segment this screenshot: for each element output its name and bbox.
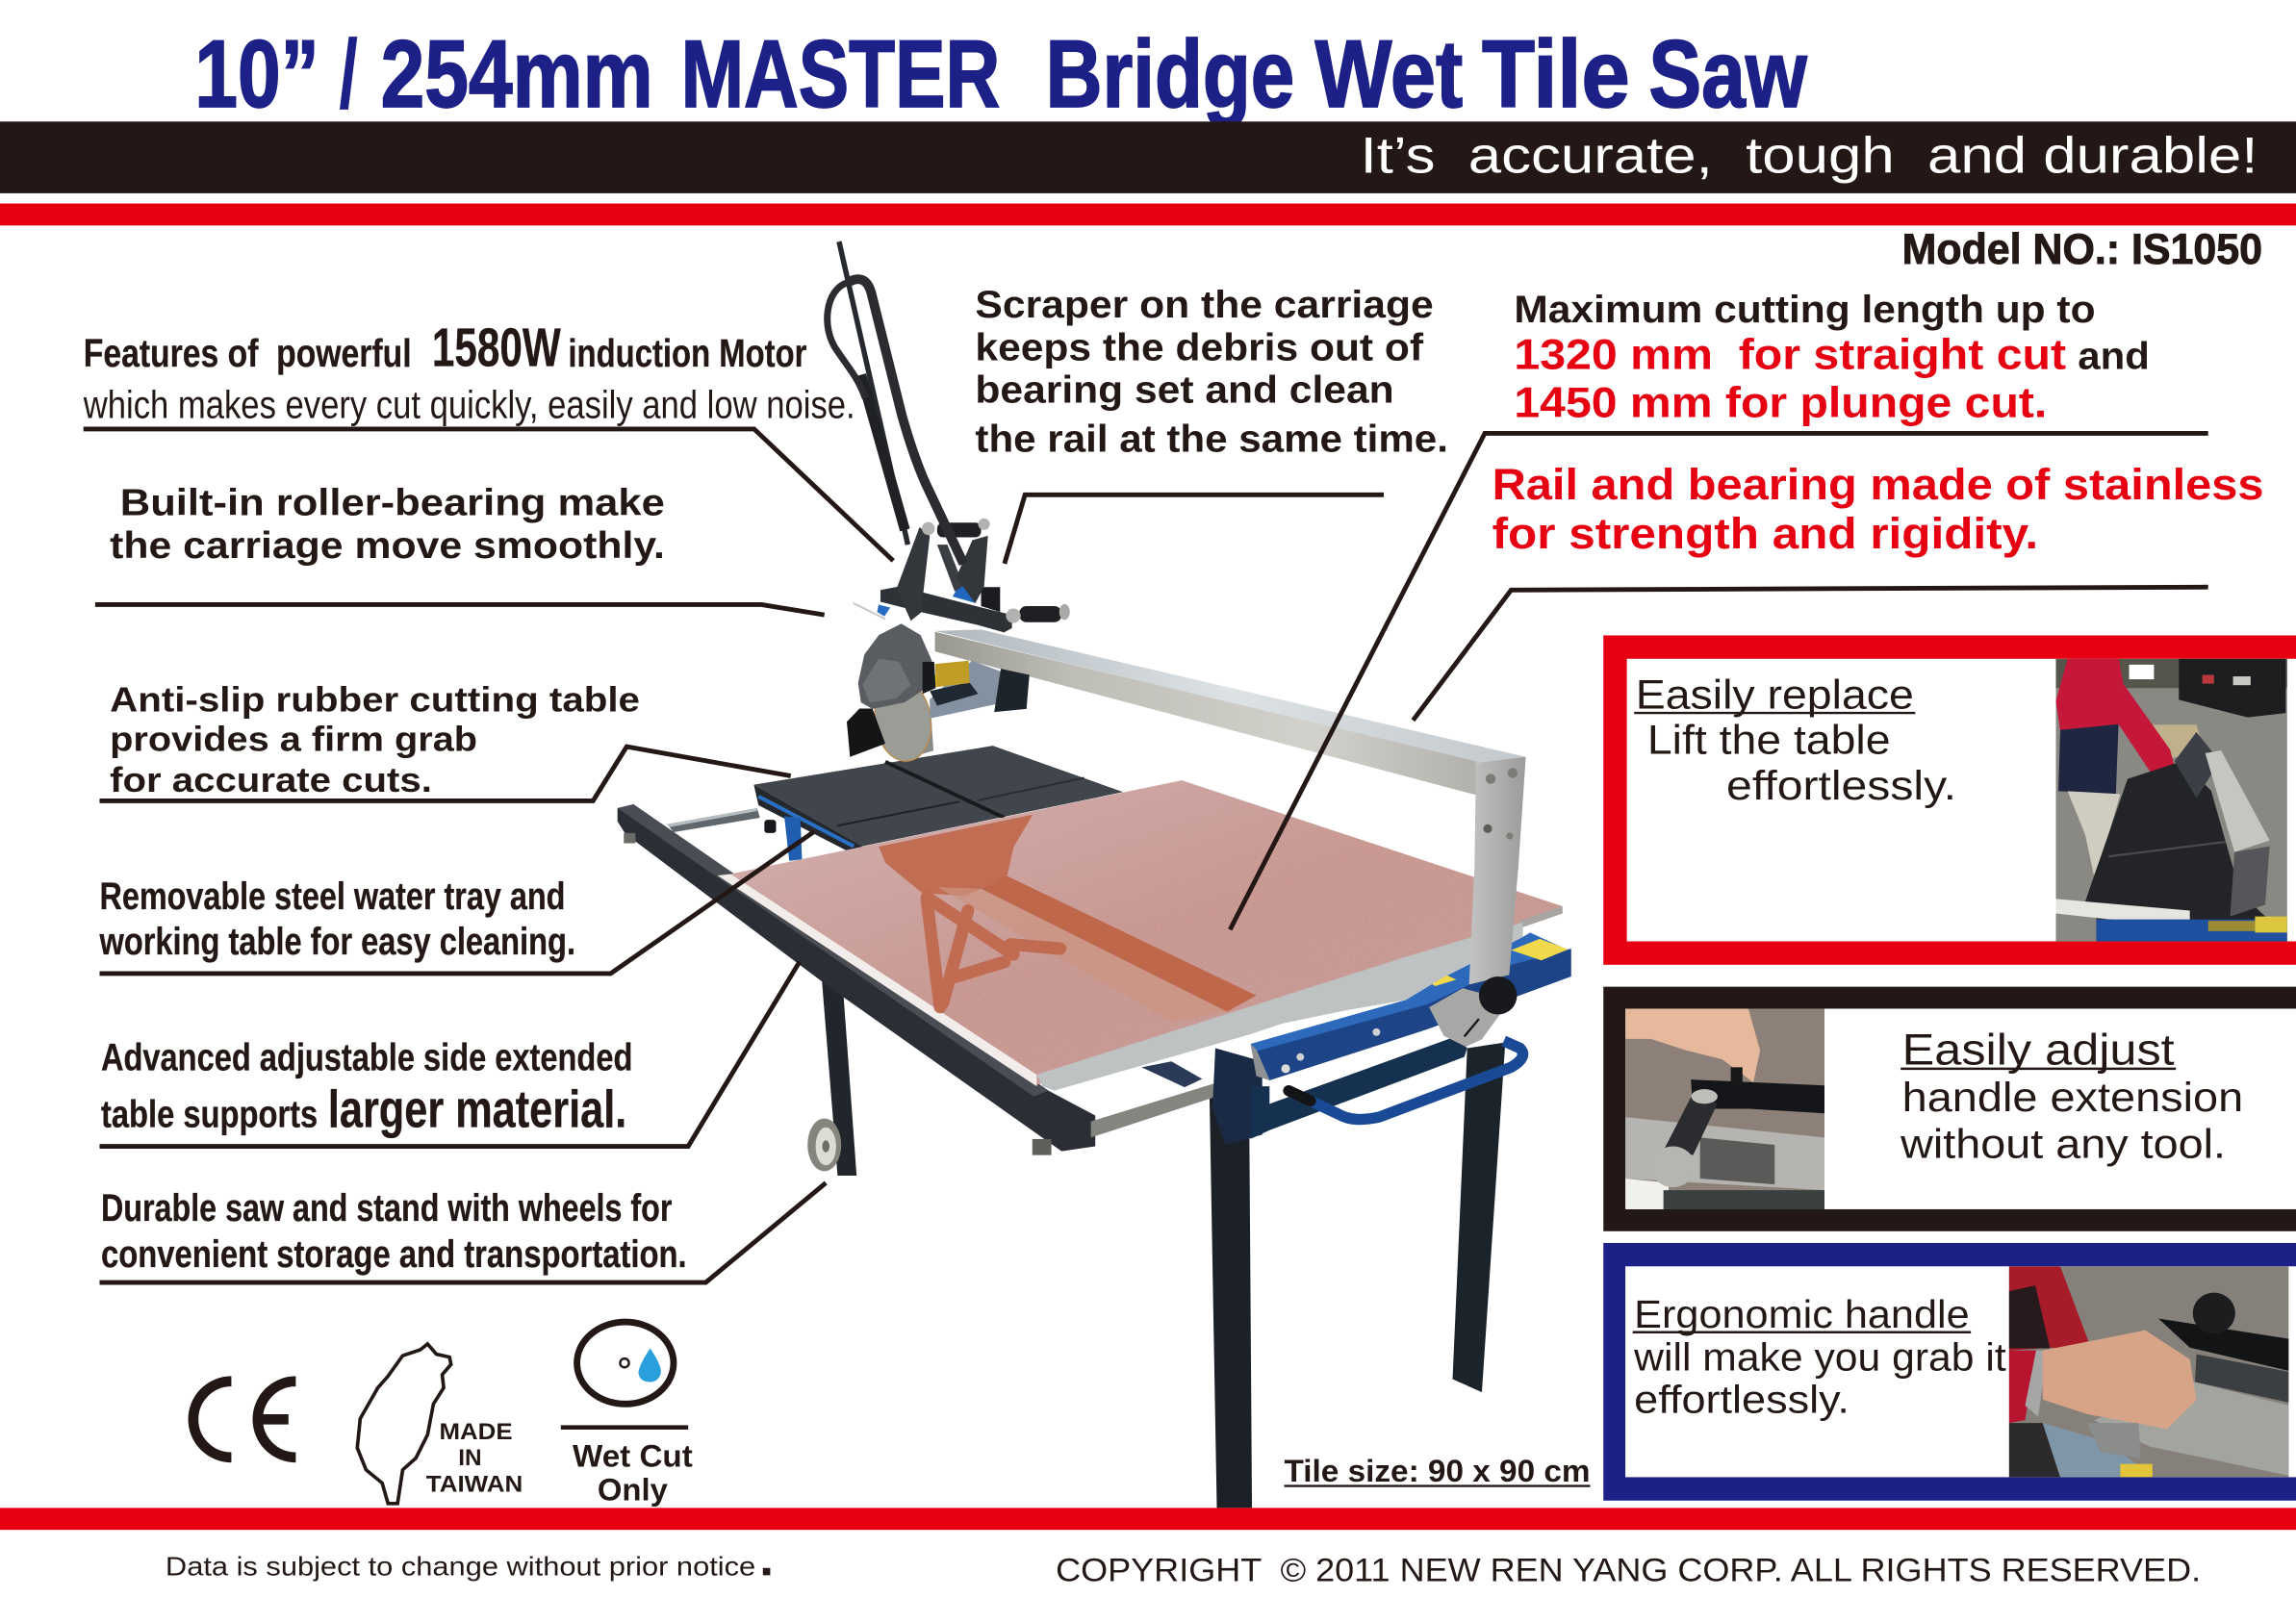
product image: bridge wet tile saw bbox=[618, 241, 1571, 1508]
blade guard bbox=[854, 603, 935, 709]
icon: wet cut only: Wet Cut bbox=[573, 1439, 693, 1474]
under-ruler strut bbox=[1141, 1061, 1202, 1087]
title: Tile bbox=[1482, 20, 1630, 127]
callout: side table: larger material. bbox=[328, 1079, 626, 1139]
rubber cutting table bbox=[753, 746, 1123, 861]
callout: stainless rail bbox=[1413, 460, 2264, 721]
callout: scraper: the rail at the same time. bbox=[975, 418, 1448, 460]
panel text: without any tool. bbox=[1900, 1122, 2226, 1168]
callout: side table: Advanced adjustable side extended bbox=[101, 1036, 632, 1078]
callout: scraper: keeps the debris out of bbox=[975, 326, 1424, 368]
callout: side table bbox=[99, 962, 800, 1147]
blue handle bar bbox=[1288, 1041, 1523, 1120]
callout: rubber table bbox=[99, 680, 791, 800]
panel text: Ergonomic handle bbox=[1634, 1292, 1970, 1336]
back leg bbox=[1453, 1042, 1505, 1392]
photo: adjusting handle bbox=[1625, 1008, 1824, 1209]
panel: ergonomic handle bbox=[1603, 1243, 2296, 1501]
tile bbox=[718, 780, 1563, 1086]
callout: stainless rail: for strength and rigidity. bbox=[1492, 509, 2038, 558]
callout: wheels: convenient storage and transportation. bbox=[101, 1233, 687, 1276]
footer copyright: COPYRIGHT © 2011 NEW REN YANG CORP. ALL RIGHTS RESERVED. bbox=[1056, 1552, 2201, 1588]
motor bbox=[924, 661, 1030, 719]
blue base bbox=[1251, 932, 1571, 1080]
callout: wheels: Durable saw and stand with wheels for bbox=[101, 1187, 672, 1230]
callout: roller bearing: Built-in roller-bearing make bbox=[120, 483, 665, 524]
title: Bridge bbox=[1045, 20, 1294, 127]
callout: roller bearing: the carriage move smoothly. bbox=[110, 525, 665, 567]
icon: Taiwan made-in mark: IN bbox=[458, 1445, 482, 1471]
cross bar bbox=[1091, 1075, 1243, 1137]
callout: motor: induction Motor bbox=[568, 331, 806, 375]
title: 254mm bbox=[381, 20, 653, 127]
title: 10” bbox=[194, 20, 319, 127]
callout: rubber table: Anti-slip rubber cutting table bbox=[110, 680, 640, 720]
callout: side table: table supports bbox=[101, 1094, 318, 1136]
icon: Taiwan made-in mark: TAIWAN bbox=[426, 1472, 523, 1498]
photo: gripping handle bbox=[2009, 1266, 2288, 1478]
panel text: handle extension bbox=[1902, 1075, 2243, 1121]
left leg and wheel bbox=[807, 975, 856, 1176]
icon: wet cut only bbox=[561, 1322, 693, 1508]
rear support bar and foot bbox=[667, 808, 776, 833]
side table front rail bbox=[618, 804, 1095, 1155]
title bbox=[194, 20, 1808, 127]
callout: motor: 1580W bbox=[432, 317, 561, 377]
photo: lifting the table bbox=[2055, 658, 2287, 941]
callout: rubber table: for accurate cuts. bbox=[110, 760, 432, 799]
footer red bar bbox=[0, 1508, 2296, 1530]
callout: scraper bbox=[975, 284, 1448, 564]
callout: motor: Features of powerful bbox=[84, 331, 412, 375]
icon: wet cut only: Only bbox=[598, 1473, 668, 1508]
carriage bbox=[880, 519, 1070, 632]
callout: rubber table: provides a firm grab bbox=[110, 720, 477, 759]
callout: scraper: Scraper on the carriage bbox=[975, 284, 1434, 326]
callout: water tray: working table for easy cleaning. bbox=[99, 921, 575, 963]
panel text: effortlessly. bbox=[1634, 1377, 1850, 1421]
callout: water tray bbox=[99, 831, 814, 974]
ruler guide bbox=[1036, 923, 1523, 1091]
callout: motor bbox=[83, 317, 893, 561]
panel text: Easily adjust bbox=[1902, 1025, 2175, 1074]
tile size note: Tile size: 90 x 90 cm bbox=[1285, 1454, 1591, 1488]
panel text bbox=[1900, 1025, 2243, 1168]
rail top and front bbox=[935, 629, 1526, 795]
header banner with slogan: It’s accurate, tough and durable! bbox=[1361, 128, 2258, 185]
callout: wheels bbox=[99, 1183, 826, 1282]
callout: roller bearing bbox=[95, 483, 825, 615]
panel text: will make you grab it bbox=[1633, 1334, 2006, 1379]
title: MASTER bbox=[681, 20, 1000, 127]
footer disclaimer: Data is subject to change without prior notice bbox=[166, 1551, 755, 1581]
callout: cutting length: 1320 mm for straight cut bbox=[1514, 331, 2066, 378]
tile reflection bbox=[879, 815, 1257, 1022]
panel text: Easily replace bbox=[1636, 672, 1914, 719]
model number: Model NO.: IS1050 bbox=[1902, 226, 2262, 273]
front leg bbox=[1210, 1086, 1252, 1508]
panel text bbox=[1633, 1292, 2006, 1421]
panel: easily adjust bbox=[1603, 987, 2296, 1231]
panel: easily replace bbox=[1603, 635, 2296, 965]
icon: Taiwan made-in mark bbox=[357, 1344, 523, 1504]
panel text: Lift the table bbox=[1647, 718, 1890, 764]
callout: cutting length: 1450 mm for plunge cut. bbox=[1514, 380, 2047, 427]
lower frame bbox=[1251, 1036, 1467, 1139]
panel text: effortlessly. bbox=[1726, 763, 1956, 809]
callout: stainless rail: Rail and bearing made of stainless bbox=[1492, 460, 2264, 509]
saw blade and support bbox=[847, 675, 936, 765]
callout: scraper: bearing set and clean bbox=[975, 368, 1394, 411]
title: / bbox=[340, 20, 357, 127]
callout: motor: which makes every cut quickly, easily and low noise. bbox=[83, 382, 855, 426]
tall handle and hose bbox=[828, 241, 963, 564]
leg joint bbox=[1212, 1049, 1263, 1145]
header banner with slogan bbox=[0, 121, 2296, 225]
callout: cutting length: Maximum cutting length up to bbox=[1514, 289, 2096, 331]
callout: water tray: Removable steel water tray and bbox=[99, 875, 565, 918]
panel text bbox=[1634, 672, 1956, 809]
rail end post bbox=[1429, 757, 1526, 1047]
callout: cutting length bbox=[1230, 289, 2208, 929]
callout: cutting length: and bbox=[2078, 335, 2150, 377]
icon: CE mark bbox=[193, 1382, 295, 1458]
icon: Taiwan made-in mark: MADE bbox=[440, 1419, 513, 1445]
title: Wet bbox=[1314, 20, 1463, 127]
title: Saw bbox=[1648, 20, 1808, 127]
